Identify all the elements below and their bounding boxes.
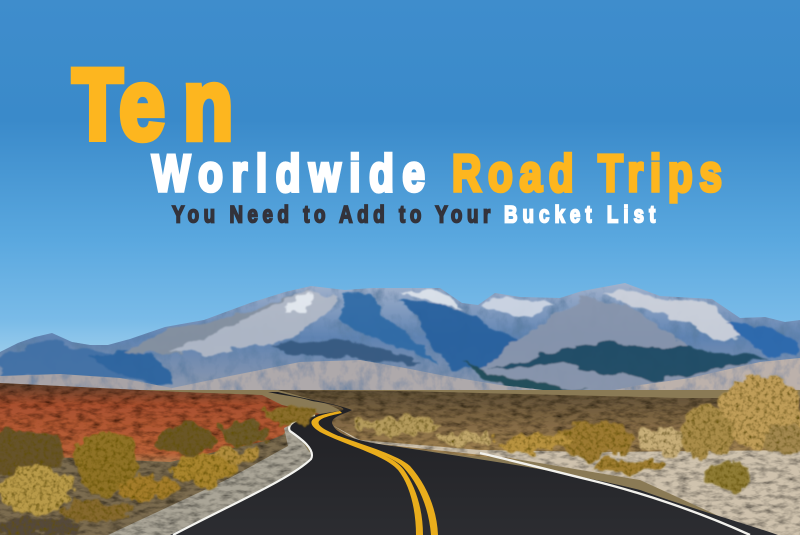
right gravel shoulder [332, 425, 800, 535]
ground base [0, 390, 800, 535]
road right white edge line [480, 453, 750, 535]
title: Worldwide Road Trips: Road Trips [452, 144, 722, 202]
subtitle: You Need to Add to Your Bucket List: You Need to Add to Your [172, 201, 491, 228]
title: Worldwide Road Trips: Worldwide [152, 144, 425, 202]
left sagebrush bushes [0, 407, 316, 535]
left roadside ground [0, 432, 300, 535]
left gravel shoulder [108, 414, 318, 535]
title: Ten: Ten [72, 49, 233, 161]
left red desert field [0, 383, 320, 470]
road left white edge line [173, 415, 315, 535]
tan foothills [0, 358, 800, 398]
road double yellow centre line [311, 411, 438, 535]
right sagebrush bushes [360, 376, 800, 489]
sky background [0, 0, 800, 400]
subtitle: You Need to Add to Your Bucket List: Bucket List [504, 201, 655, 228]
road [170, 392, 778, 535]
mountain range [0, 283, 800, 398]
right scrub field [278, 390, 800, 470]
title: Worldwide Road Trips [152, 144, 722, 202]
subtitle: You Need to Add to Your Bucket List [172, 201, 655, 228]
